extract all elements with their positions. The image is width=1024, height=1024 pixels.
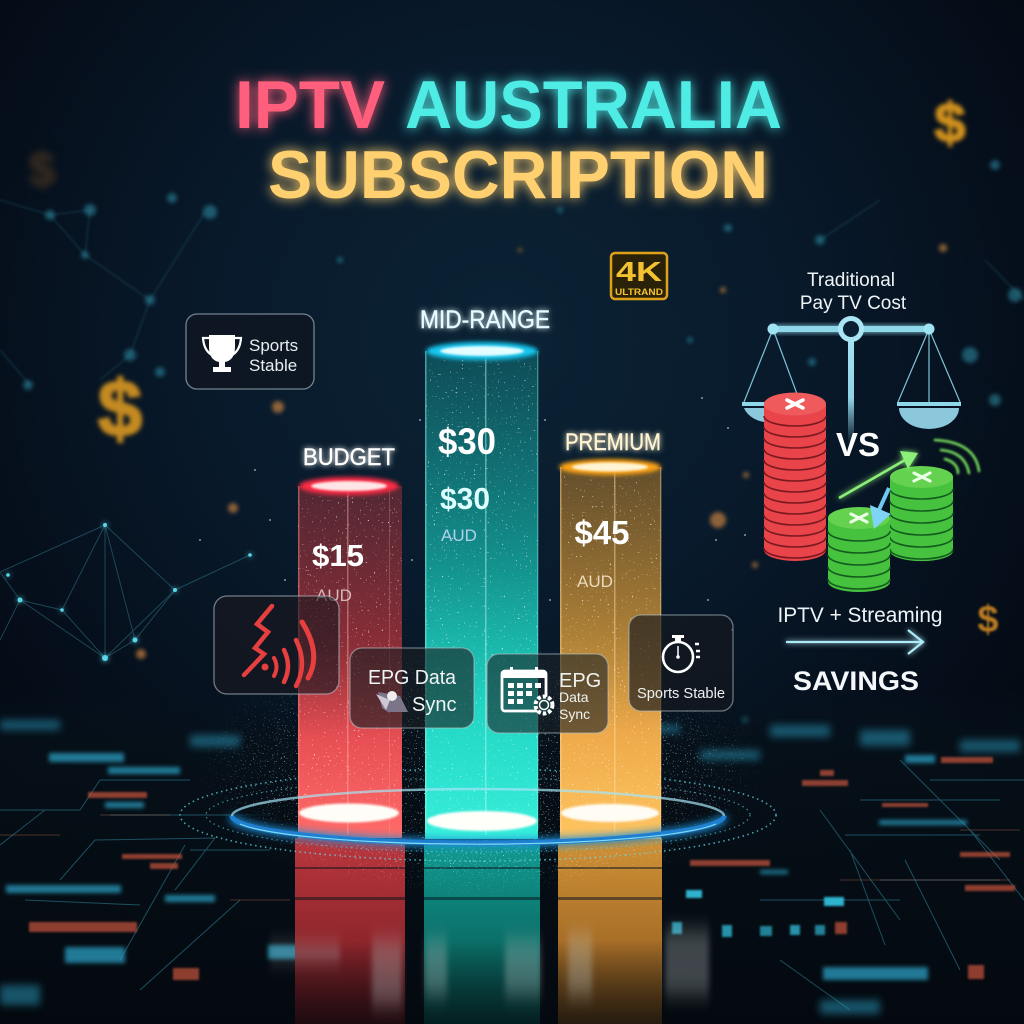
badge: 4K ultra HD: ULTRAND xyxy=(615,287,663,298)
budget column base light xyxy=(299,804,399,822)
title word: IPTV: IPTV xyxy=(235,67,385,143)
text: VS: VS xyxy=(836,426,880,463)
budget column top glow xyxy=(299,477,399,495)
premium column top glow xyxy=(559,459,661,475)
particle cloud xyxy=(190,640,770,900)
price: budget xyxy=(312,538,364,605)
icon: stopwatch xyxy=(663,635,700,672)
card: sports stable trophy xyxy=(186,314,314,389)
title xyxy=(235,67,782,213)
heading: PREMIUM: PREMIUM xyxy=(565,429,661,456)
badge: 4K ultra HD xyxy=(611,253,667,299)
card text: sports stable: Sports xyxy=(249,336,298,355)
red coin stack: traditional cost xyxy=(764,392,826,561)
dollar sign: top right: $ xyxy=(934,91,966,154)
card text: EPG data sync small: EPG xyxy=(559,670,601,692)
dollar sign: upper left: $ xyxy=(29,144,56,197)
dollar sign: lower right: $ xyxy=(977,599,999,641)
card: signal interference xyxy=(214,596,339,694)
arrow: to savings xyxy=(786,630,923,654)
green coin stack: back xyxy=(890,466,953,561)
glowing ring platform xyxy=(180,769,776,861)
comparison label: traditional pay TV cost: Pay TV Cost xyxy=(800,293,907,314)
green coin stack: front xyxy=(828,507,890,592)
price: premium xyxy=(574,514,630,591)
mid-range column top glow xyxy=(426,342,538,360)
price: budget: $15 xyxy=(312,538,364,573)
icon: broken signal xyxy=(244,606,314,686)
comparison label: traditional pay TV cost: Traditional xyxy=(807,270,895,291)
label: savings: SAVINGS xyxy=(793,666,919,696)
title word: SUBSCRIPTION: SUBSCRIPTION xyxy=(268,137,768,213)
arrow: blue down xyxy=(870,488,891,529)
heading: MID-RANGE: MID-RANGE xyxy=(420,306,550,334)
column: premium xyxy=(559,459,662,839)
heading: BUDGET: BUDGET xyxy=(303,444,395,471)
card text: EPG data sync small: Sync xyxy=(559,706,590,722)
card text: EPG data sync: Sync xyxy=(412,694,456,716)
icon: trophy xyxy=(203,335,241,372)
column reflections xyxy=(270,838,709,1024)
card: EPG data sync 1 xyxy=(350,648,474,728)
price: premium: $45 xyxy=(574,514,630,551)
arrow: green growth xyxy=(839,451,918,498)
icon: calendar with gear xyxy=(502,667,552,714)
card text: EPG data sync: EPG Data xyxy=(368,667,457,689)
circuit floor xyxy=(0,690,1024,1024)
icon: wifi arcs xyxy=(935,440,979,473)
icon: sync blob xyxy=(376,691,408,712)
title word: AUSTRALIA: AUSTRALIA xyxy=(405,67,782,143)
balance scale xyxy=(742,318,961,444)
label: IPTV + streaming: IPTV + Streaming xyxy=(778,604,942,627)
price: mid-range: AUD xyxy=(441,526,477,545)
price: premium: AUD xyxy=(577,572,613,591)
card text: sports stable: Sports Stable xyxy=(637,685,725,702)
price: mid-range xyxy=(438,421,496,545)
premium column base light xyxy=(561,804,659,822)
left scale pan xyxy=(742,402,800,423)
card text: EPG data sync small: Data xyxy=(559,689,589,705)
column: budget xyxy=(298,477,402,838)
background network and bokeh xyxy=(0,160,1024,724)
price: budget: AUD xyxy=(316,586,352,605)
column: mid-range xyxy=(425,342,538,839)
dollar sign: left: $ xyxy=(98,364,142,453)
mid-range column base light xyxy=(427,811,537,831)
card: sports stable stopwatch xyxy=(629,615,733,711)
card text: EPG data sync small xyxy=(559,670,601,722)
right scale pan xyxy=(897,402,961,429)
central ring xyxy=(232,789,724,844)
price: mid-range: $30 xyxy=(440,481,490,516)
price: mid-range: $30 xyxy=(438,421,496,462)
column sparkle particles xyxy=(298,360,661,820)
card text: sports stable: Stable xyxy=(249,356,297,375)
card: EPG data sync 2 xyxy=(487,654,608,733)
badge: 4K ultra HD: 4K xyxy=(616,256,662,287)
